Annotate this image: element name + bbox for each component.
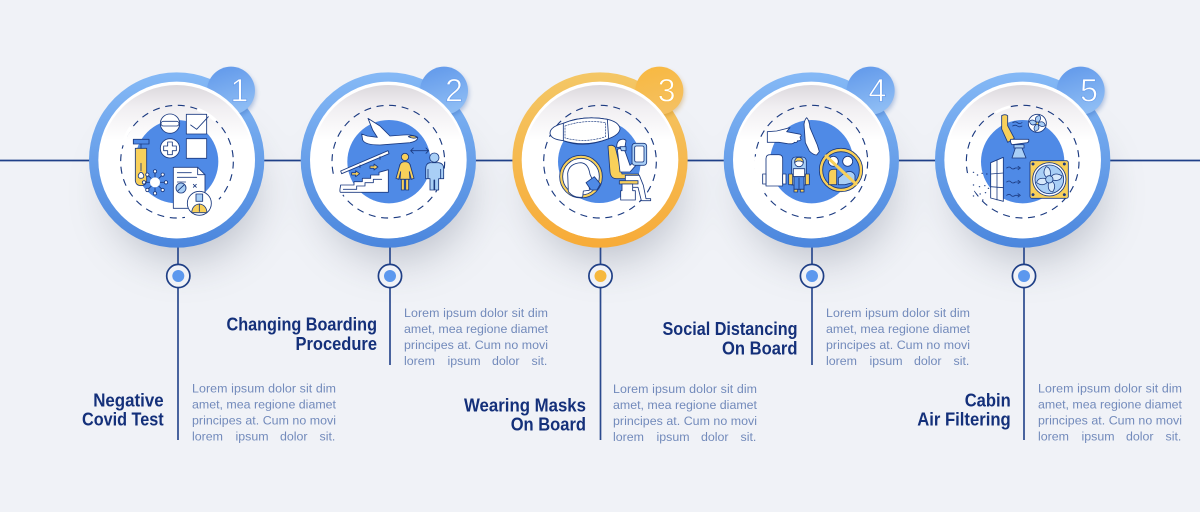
icon: cabin air filter and fans [973,114,1068,201]
step 4 stem and node [800,245,824,365]
text block: step 5: Lorem ipsum dolor sit dim [1038,382,1182,396]
badge 4 [847,67,895,115]
heading: Negative Covid Test [82,391,164,430]
text block: step 1: ipsum [236,430,269,444]
text block: step 1 [192,382,337,444]
text block: step 5: principes at. Cum no movi [1038,414,1182,428]
heading: Social Distancing On Board: On Board [722,338,798,358]
timeline horizontal line [0,160,1200,162]
heading: Negative Covid Test: Negative [93,391,164,411]
badge 1 [207,67,255,115]
step 5 stem and node [1012,245,1036,440]
badge 2 [420,67,468,115]
heading: Cabin Air Filtering [917,391,1011,430]
heading: Changing Boarding Procedure: Procedure [296,334,377,354]
panel: step 4 circle [724,67,899,248]
text block: step 1: lorem [192,430,223,444]
step 1 stem and node [167,245,190,440]
text block: step 5 [1038,382,1183,444]
text block: step 4: principes at. Cum no movi [826,338,970,352]
icon: distancing hands and seats [763,118,863,192]
text block: step 1: amet, mea regione diamet [192,398,337,412]
badge 4: 4 [868,73,886,109]
panel: step 2 circle [301,67,476,248]
text block: step 3: amet, mea regione diamet [613,398,758,412]
text block: step 2: lorem [404,354,435,368]
text block: step 2: principes at. Cum no movi [404,338,548,352]
text block: step 4: lorem [826,354,857,368]
heading: Social Distancing On Board [662,319,798,358]
text block: step 2 [404,306,549,368]
step 3 stem and node [589,245,612,440]
text block: step 2: ipsum [448,354,481,368]
text block: step 2: dolor [492,354,520,368]
badge 5: 5 [1080,73,1098,109]
text block: step 4: Lorem ipsum dolor sit dim [826,306,970,320]
text block: step 3: ipsum [656,430,690,444]
badge 5 [1057,67,1105,115]
text block: step 3: Lorem ipsum dolor sit dim [613,382,757,396]
text block: step 4: amet, mea regione diamet [826,322,971,336]
text block: step 3: lorem [613,430,644,444]
badge 1: 1 [230,73,248,109]
badge 2: 2 [445,73,463,109]
badge 3: 3 [658,73,676,109]
badge 3 [635,67,683,115]
text block: step 2: Lorem ipsum dolor sit dim [404,306,548,320]
text block: step 4 [826,306,971,368]
heading: Changing Boarding Procedure: Changing Boarding [226,314,377,334]
text block: step 1: dolor [280,430,308,444]
step 2 stem and node [378,245,402,365]
text block: step 4: ipsum [870,354,903,368]
icon: negative test document [133,114,211,215]
text block: step 3: principes at. Cum no movi [613,414,757,428]
heading: Cabin Air Filtering: Air Filtering [917,410,1011,430]
heading: Social Distancing On Board: Social Distancing [662,319,798,339]
icon: mask and seated passenger [550,118,651,201]
heading: Wearing Masks On Board: On Board [511,415,586,435]
text block: step 3: dolor [701,430,729,444]
text block: step 1: principes at. Cum no movi [192,414,336,428]
text block: step 5: amet, mea regione diamet [1038,398,1183,412]
heading: Wearing Masks On Board [464,396,586,435]
circle shadows [112,127,1102,259]
text block: step 1: sit. [320,430,335,444]
icon: plane, stairs and people [340,118,444,192]
panel: step 3 circle [512,67,688,248]
text block: step 4: sit. [954,354,969,368]
text block: step 1: Lorem ipsum dolor sit dim [192,382,336,396]
heading: Wearing Masks On Board: Wearing Masks [464,396,586,416]
text block: step 5: ipsum [1082,430,1115,444]
text block: step 2: sit. [532,354,547,368]
text block: step 4: dolor [914,354,942,368]
panel: step 1 circle [89,67,264,248]
heading: Changing Boarding Procedure [226,314,377,354]
text block: step 3 [613,382,758,444]
text block: step 2: amet, mea regione diamet [404,322,549,336]
text block: step 5: dolor [1126,430,1154,444]
text block: step 5: lorem [1038,430,1069,444]
heading: Cabin Air Filtering: Cabin [965,391,1011,411]
panel: step 5 circle [935,67,1110,248]
heading: Negative Covid Test: Covid Test [82,410,164,430]
text block: step 5: sit. [1166,430,1181,444]
text block: step 3: sit. [740,430,756,444]
